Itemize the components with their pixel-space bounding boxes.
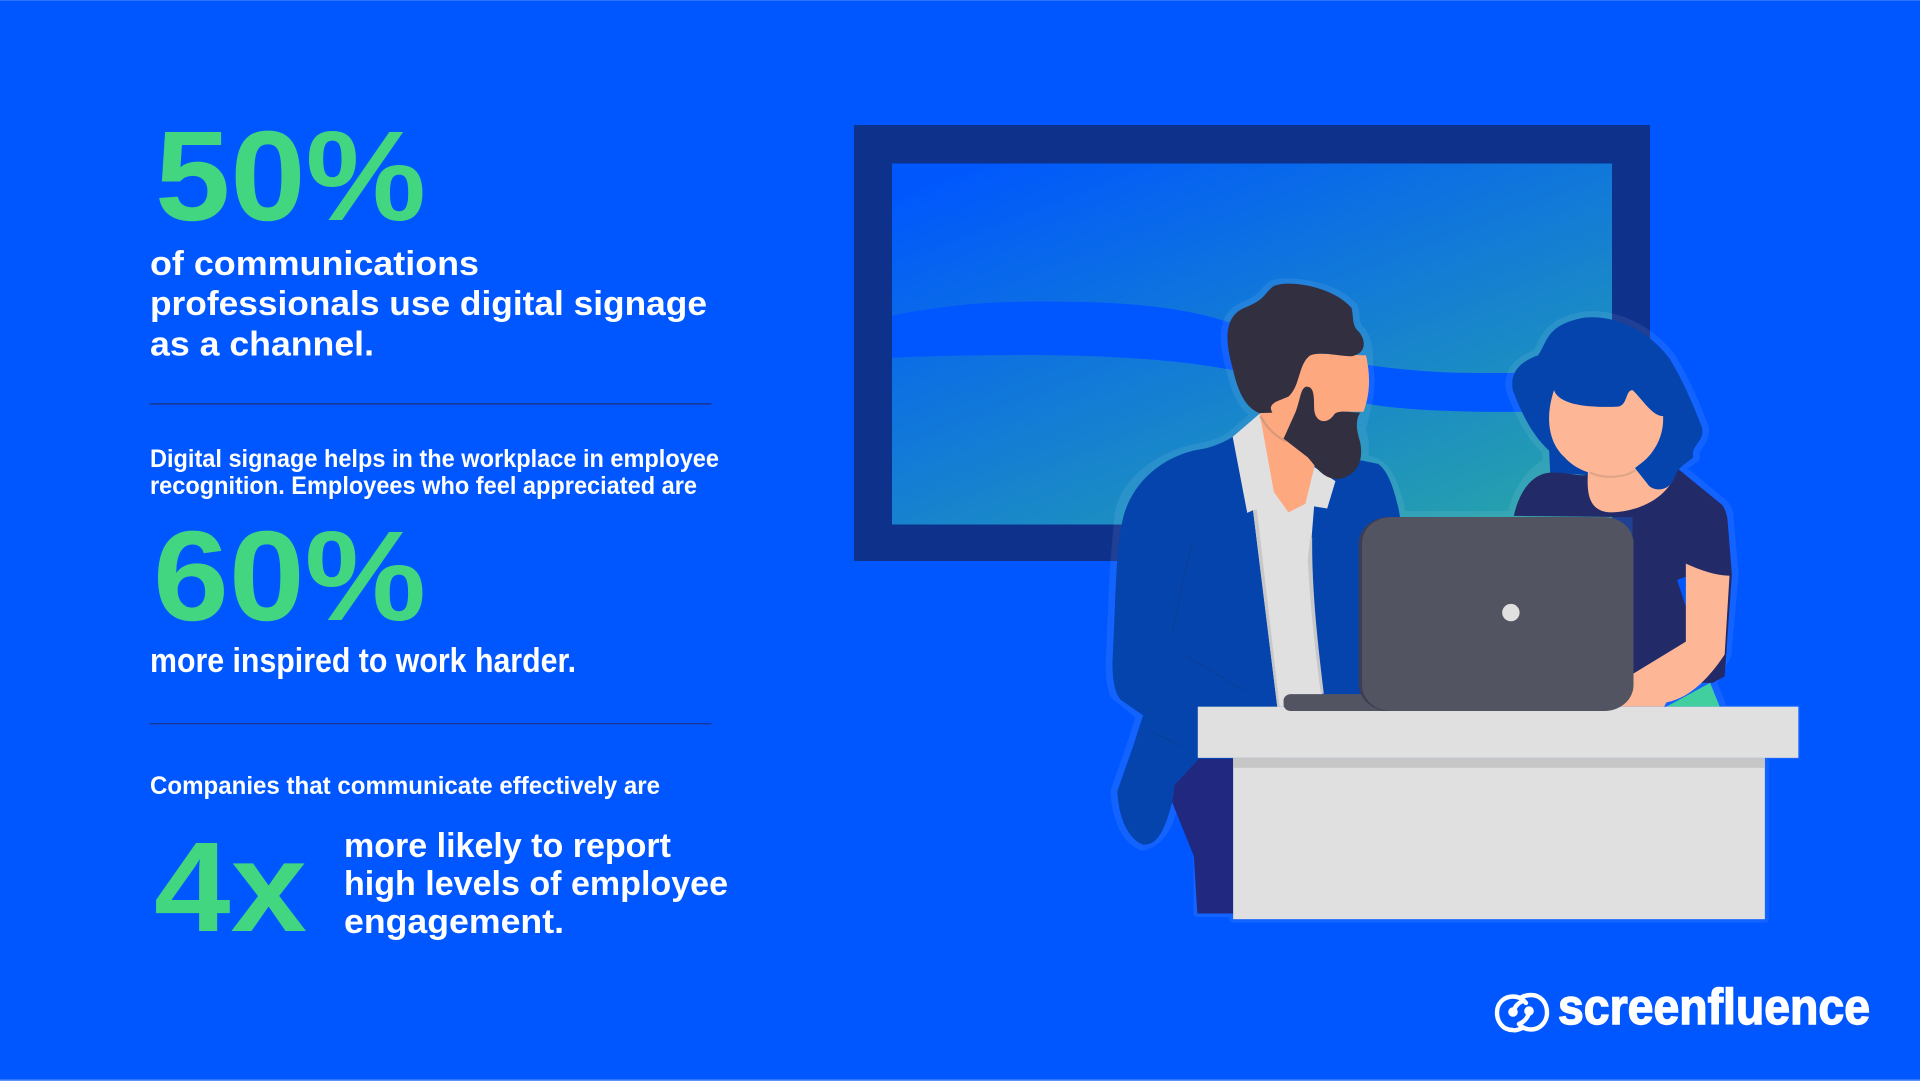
screen wave	[892, 302, 1612, 412]
woman hair	[1512, 317, 1702, 489]
stat block: 60 percent	[150, 445, 719, 680]
woman face	[1549, 390, 1663, 475]
description: inspired to work harder: more inspired to work harder.	[150, 642, 576, 680]
laptop base	[1284, 694, 1395, 711]
desk shadow	[1233, 758, 1765, 768]
intro text: employee recognition: Digital signage helps in the workplace in employee	[150, 445, 719, 473]
woman hair lock	[1635, 446, 1681, 489]
description: communications professionals: of communications	[150, 245, 479, 283]
big number 60%: 60%	[153, 505, 426, 648]
intro text: companies: Companies that communicate effectively are	[150, 772, 660, 800]
man jacket creases	[1154, 544, 1244, 746]
woman arm	[1620, 564, 1729, 707]
desk	[1198, 707, 1798, 919]
big number 4x: 4x	[154, 816, 307, 959]
logo icon: linked rings	[1497, 995, 1547, 1030]
logo: screenfluence	[1497, 979, 1870, 1035]
man shirt	[1233, 414, 1335, 707]
logo wordmark: screenfluence	[1558, 979, 1870, 1035]
description: communications professionals	[150, 245, 707, 364]
intro text: employee recognition	[150, 445, 719, 500]
stat block: 4x	[150, 772, 728, 959]
description: employee engagement: more likely to report	[344, 827, 671, 865]
big number 50%: 50%	[155, 105, 426, 248]
stat block: 50 percent	[150, 105, 707, 364]
man neck and face	[1259, 353, 1369, 512]
description: employee engagement: engagement.	[344, 903, 564, 941]
desk top	[1198, 707, 1798, 758]
laptop edge	[1359, 517, 1620, 711]
woman top	[1514, 468, 1732, 683]
woman gap	[1677, 577, 1686, 607]
laptop	[1284, 517, 1634, 711]
laptop logo dot	[1502, 604, 1520, 621]
man jacket	[1112, 437, 1400, 845]
desk body	[1233, 758, 1765, 919]
description: communications professionals: as a channel.	[150, 326, 374, 364]
man beard	[1284, 387, 1361, 479]
description: employee engagement: high levels of employee	[344, 865, 728, 903]
description: employee engagement	[344, 827, 728, 941]
intro text: employee recognition: recognition. Employees who feel appreciated are	[150, 472, 697, 500]
screen frame	[854, 125, 1650, 561]
description: communications professionals: professionals use digital signage	[150, 285, 707, 323]
man	[1112, 284, 1400, 914]
soft halo behind figures	[1112, 285, 1798, 919]
woman skirt	[1666, 683, 1720, 707]
screen display	[892, 164, 1612, 524]
woman neck	[1588, 464, 1674, 512]
illustration: two people at a desk	[1112, 284, 1798, 919]
man hair	[1228, 284, 1364, 413]
man trousers	[1172, 759, 1233, 914]
laptop lid	[1362, 517, 1634, 711]
woman	[1512, 317, 1732, 707]
illustration: digital screen on wall	[854, 125, 1650, 561]
